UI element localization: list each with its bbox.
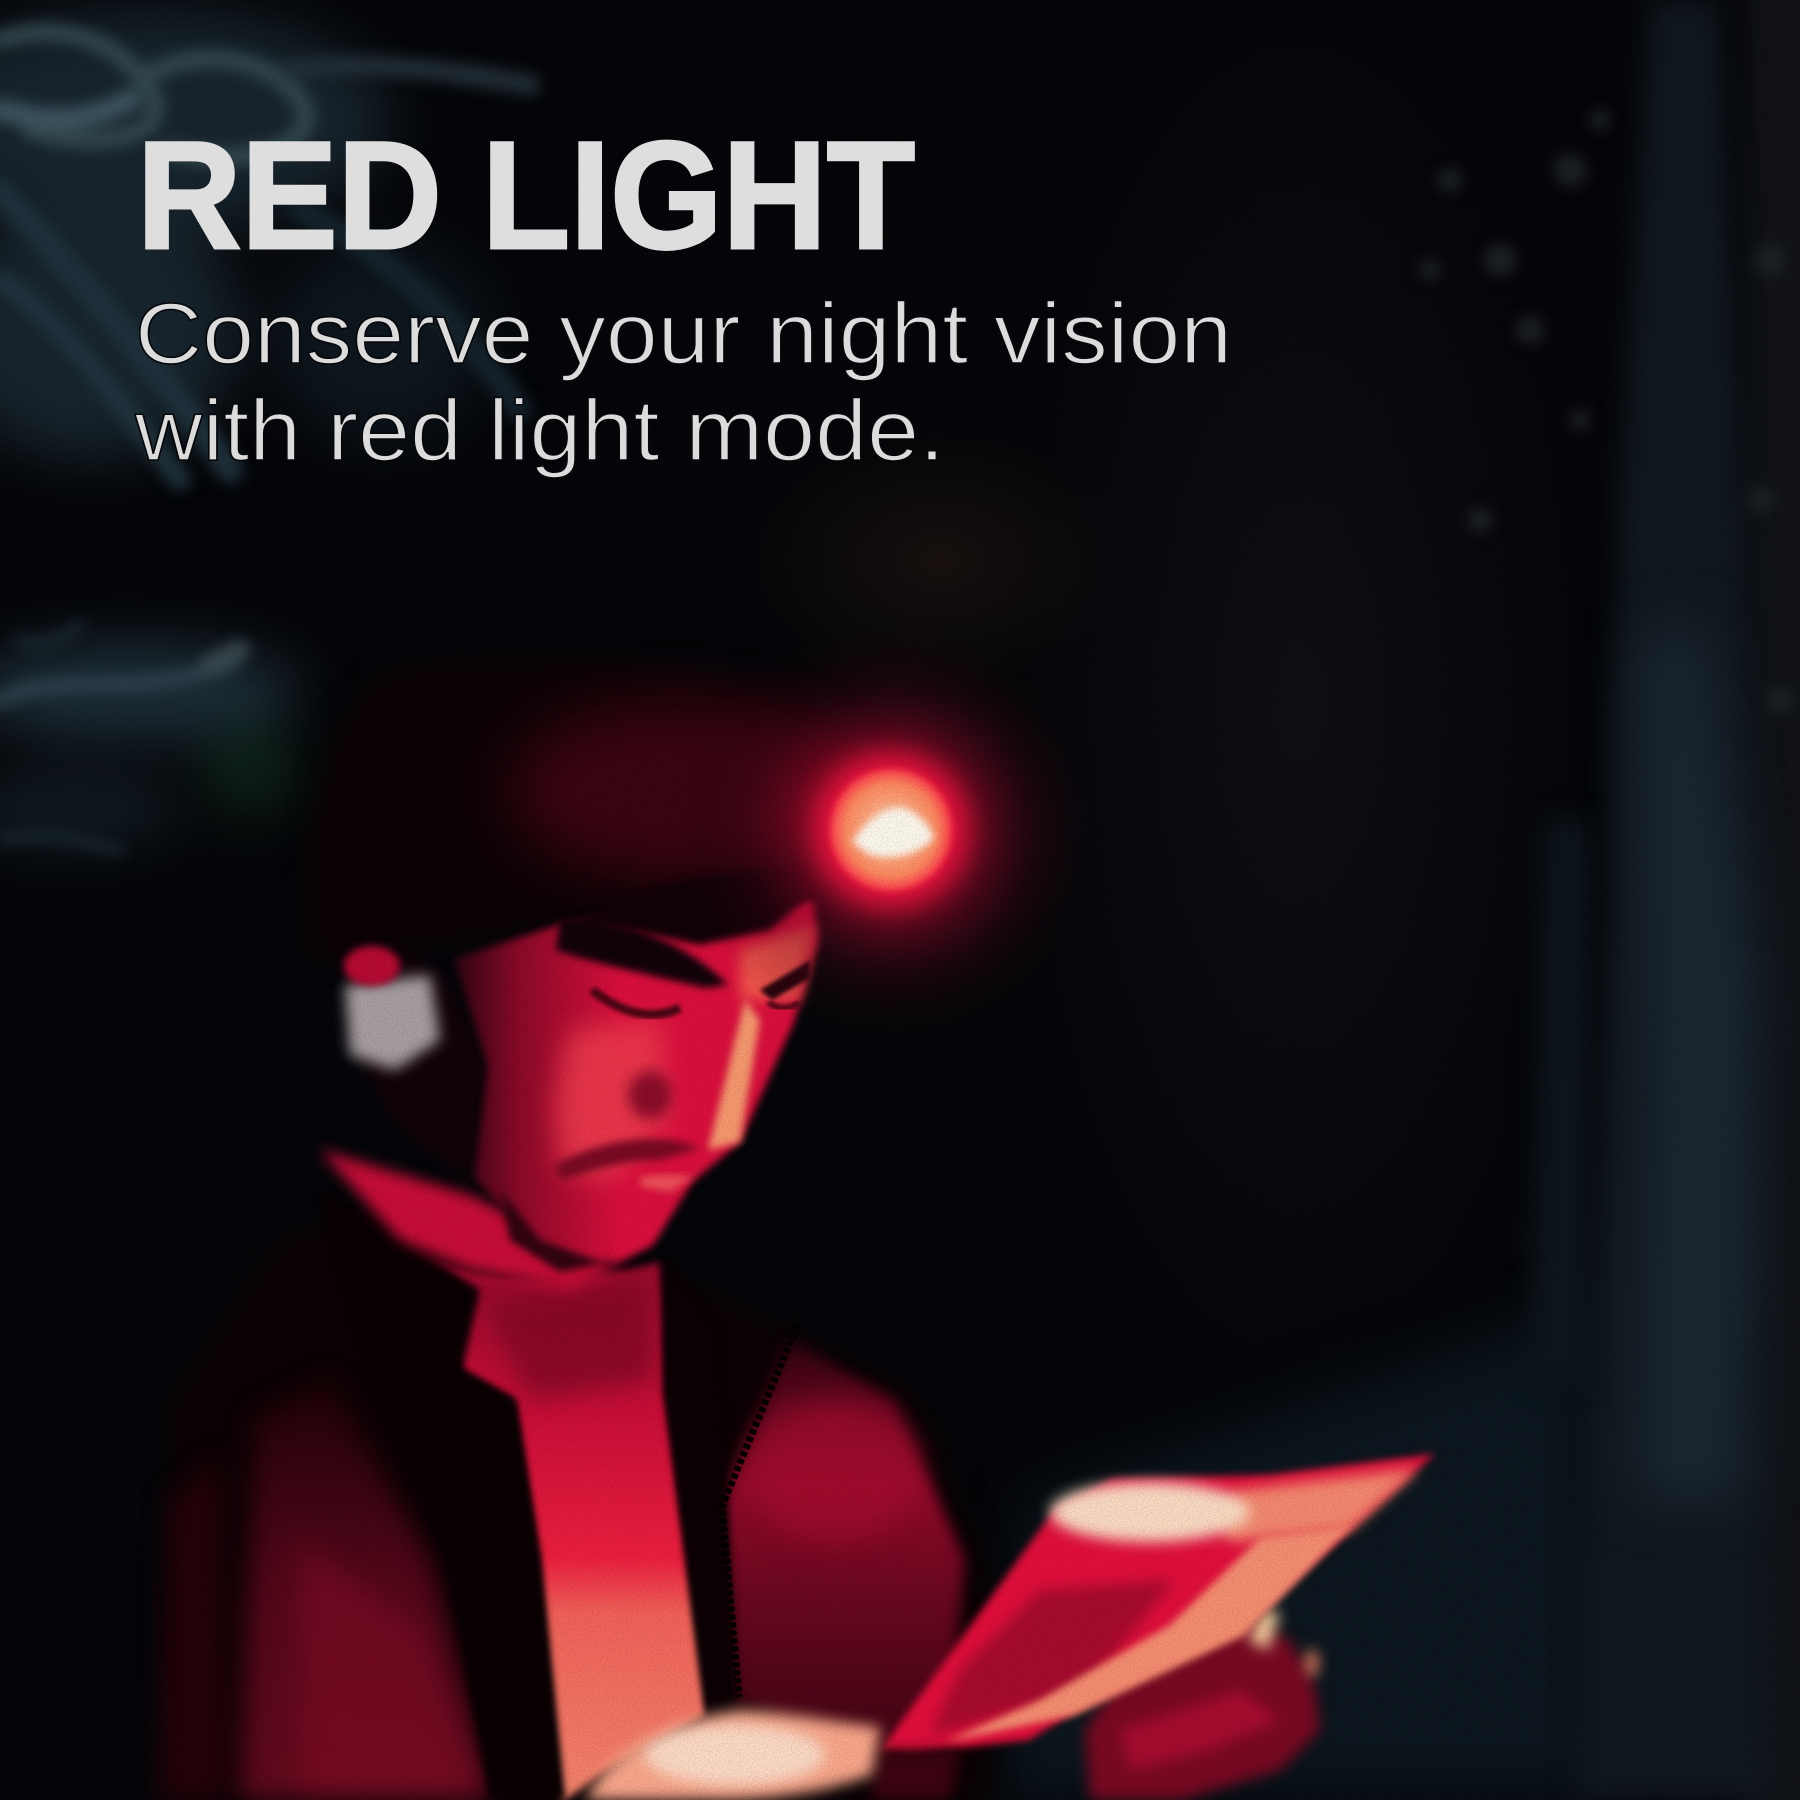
tree trunk on the right (1530, 0, 1770, 1800)
zipper (722, 1326, 797, 1697)
moustache (555, 1139, 700, 1180)
icon: red headlamp glow (681, 620, 1101, 1040)
title: RED LIGHT (137, 110, 915, 281)
subtitle text block: Conserve your night vision (135, 286, 1232, 382)
eyes (592, 990, 680, 1014)
foliage: top left (0, 10, 530, 480)
neck (320, 1150, 620, 1290)
subtitle text block: with red light mode. (134, 383, 945, 479)
map: bright upper band (1050, 1468, 1420, 1542)
face (454, 872, 830, 1272)
right hand (1085, 1610, 1320, 1800)
hair and ear (340, 946, 490, 1180)
nose shadow (628, 1071, 672, 1119)
eyebrows (556, 918, 728, 988)
beard shadow (500, 1190, 640, 1272)
map: peach diagonal fold (945, 1525, 1353, 1742)
map: printed dark area (930, 1580, 1175, 1735)
jacket: left panel (160, 1380, 495, 1800)
jacket: body silhouette (160, 1190, 990, 1800)
lips (640, 1175, 695, 1192)
map held in the hands (880, 1454, 1435, 1753)
lapel: dark collar and placket (320, 1190, 735, 1800)
hat (308, 661, 880, 960)
left hand (585, 1710, 960, 1800)
head and hat (308, 661, 880, 1272)
jacket: right panel (722, 1340, 965, 1750)
background: blurred distant trees and ground (750, 0, 1800, 1800)
foliage: mid left (0, 625, 300, 850)
subtitle text block (134, 286, 1232, 479)
fringe (570, 872, 830, 945)
nose highlight (708, 1000, 760, 1150)
shirt (320, 1190, 797, 1800)
